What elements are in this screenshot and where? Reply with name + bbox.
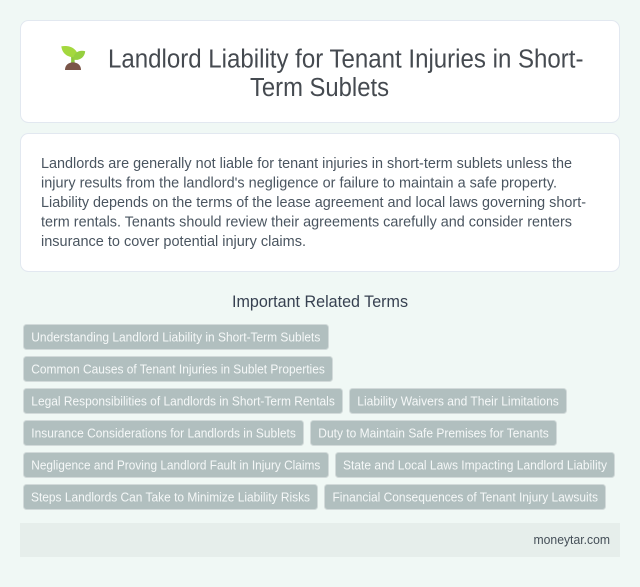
footer source text: moneytar.com: [534, 533, 610, 547]
tag: financial consequences: [324, 484, 606, 510]
tag: legal responsibilities: [24, 388, 342, 414]
tag: duty to maintain: [310, 420, 556, 446]
tag list: [24, 324, 614, 510]
heading: important related terms: Important Related Terms: [232, 293, 408, 311]
tag: negligence: [24, 452, 328, 478]
tag: negligence: Negligence and Proving Landlord Fault in Injury Claims: [31, 458, 320, 472]
tag: state and local laws: State and Local Laws Impacting Landlord Liability: [343, 458, 608, 472]
summary paragraph: Liability depends on the terms of the lease agreement and local laws governing short-: [41, 195, 586, 211]
panel: title card: [20, 20, 620, 122]
icon: seedling: [61, 46, 85, 70]
title: [108, 46, 584, 102]
footer bar: [20, 523, 620, 557]
tag: common causes: [24, 356, 332, 382]
tag: state and local laws: [336, 452, 614, 478]
title: Term Sublets: [250, 74, 389, 102]
tag: understanding landlord liability: [24, 324, 328, 350]
tag: common causes: Common Causes of Tenant Injuries in Sublet Properties: [31, 362, 325, 376]
tag: steps landlords can take: [24, 484, 318, 510]
panel: summary card: [20, 134, 620, 272]
summary paragraph: injury results from the landlord's negligence or failure to maintain a safe property.: [41, 175, 557, 191]
tag: steps landlords can take: Steps Landlords Can Take to Minimize Liability Risks: [31, 490, 310, 504]
tag: liability waivers: [350, 388, 566, 414]
title: Landlord Liability for Tenant Injuries in Short-: [108, 46, 584, 74]
tag: insurance considerations: Insurance Considerations for Landlords in Sublets: [31, 426, 296, 440]
summary paragraph: term rentals. Tenants should review their agreements carefully and consider renters: [41, 214, 572, 230]
tag: legal responsibilities: Legal Responsibilities of Landlords in Short-Term Rentals: [31, 394, 335, 408]
summary paragraph: [41, 156, 586, 250]
summary paragraph: Landlords are generally not liable for tenant injuries in short-term sublets unless the: [41, 156, 572, 172]
tag: duty to maintain: Duty to Maintain Safe Premises for Tenants: [318, 426, 549, 440]
tag: liability waivers: Liability Waivers and Their Limitations: [357, 394, 559, 408]
tag: understanding landlord liability: Understanding Landlord Liability in Short-Term Sublets: [31, 330, 320, 344]
tag: financial consequences: Financial Consequences of Tenant Injury Lawsuits: [332, 490, 598, 504]
summary paragraph: insurance to cover potential injury claims.: [41, 234, 306, 250]
tag: insurance considerations: [24, 420, 304, 446]
